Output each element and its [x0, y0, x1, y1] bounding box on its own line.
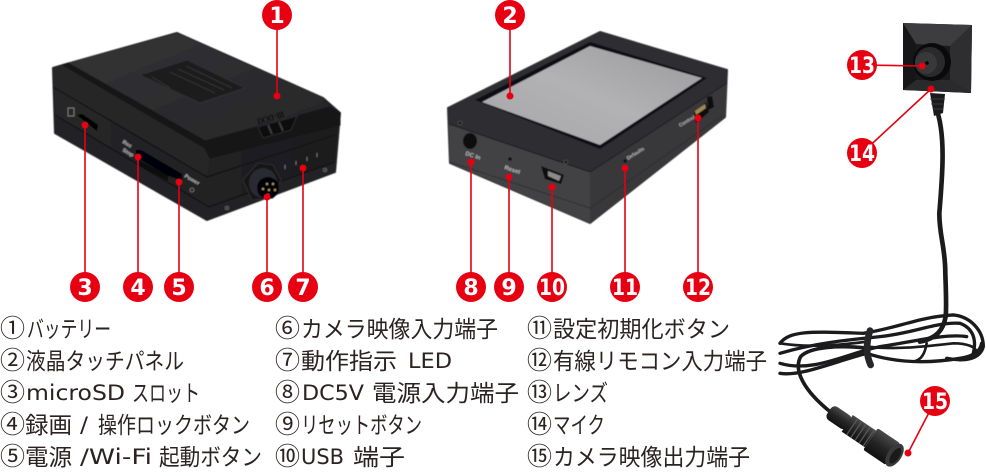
parts list: column 1: 液晶タッチパネル: [26, 348, 184, 374]
embossed marking: III-IXXI: [256, 109, 285, 126]
parts list: column 2: 動作指示: [301, 348, 397, 374]
device: front view of recorder: Defaults: [626, 146, 646, 162]
reset hole: [508, 157, 512, 161]
parts list: column 1: /Wi-Fi: [80, 445, 152, 469]
parts list: column 3: ⑬: [527, 373, 552, 409]
parts list: column 1: 起動ボタン: [159, 444, 262, 470]
camera with cable: [780, 23, 983, 470]
callout 3: microSD slot: [70, 122, 100, 302]
parts list: column 2: リセットボタン: [301, 412, 422, 438]
callout 13: lens: 13: [849, 54, 875, 79]
callout 11: default button: 11: [612, 276, 638, 301]
callout 1: battery: 1: [269, 4, 285, 29]
parts list: column 1: ②: [0, 341, 25, 377]
callout 10: USB: [537, 184, 567, 302]
microSD slot: [77, 114, 98, 131]
parts list: column 1: [0, 309, 262, 473]
callout 5: power button: 5: [171, 276, 187, 301]
parts list: column 3: 設定初期化ボタン: [553, 316, 730, 342]
callout 12: remote input: 12: [685, 276, 711, 301]
callout 15: camera output: 15: [922, 390, 948, 415]
parts list: column 2: 端子: [353, 444, 405, 470]
wired remote port: [694, 102, 709, 123]
callout 9: reset: 9: [501, 276, 517, 301]
parts list: column 3: ⑮: [527, 437, 552, 473]
callout 7: LED: [288, 164, 318, 302]
parts list: column 3: 有線リモコン入力端子: [553, 348, 767, 374]
camera cable: [780, 115, 983, 412]
callout 7: LED: 7: [295, 276, 311, 301]
device: rear view of recorder: [53, 33, 340, 220]
microSD icon: [68, 108, 74, 116]
parts list: column 3: ⑪: [527, 309, 552, 345]
parts list: column 2: ⑥: [275, 309, 300, 345]
parts list: column 2: 電源入力端子: [372, 380, 519, 406]
callout 10: USB: 10: [539, 276, 565, 301]
latch: [258, 116, 297, 138]
camera output connector: [822, 400, 908, 470]
parts list: column 3: [527, 309, 767, 473]
device: front view of recorder: [448, 32, 727, 223]
sticker label: [140, 60, 245, 103]
callout 6: camera input: [252, 194, 282, 302]
parts list: column 3: マイク: [553, 412, 605, 438]
callout 12: remote input: [683, 114, 713, 302]
parts list: column 1: 操作ロックボタン: [98, 412, 250, 438]
parts list: column 1: スロット: [132, 380, 200, 406]
callout 14: microphone: [847, 86, 934, 168]
callout 4: record button: [123, 154, 153, 302]
callout 13: lens: [847, 50, 926, 80]
parts list: column 3: ⑫: [527, 341, 552, 377]
cable tie: [867, 331, 871, 365]
bezel recess: [475, 42, 707, 149]
LCD panel: [482, 46, 702, 145]
device: front view of recorder: DC In: [464, 151, 481, 162]
device: rear view of recorder: Rec: [121, 140, 133, 150]
parts list: column 2: ⑨: [275, 405, 300, 441]
parts list: column 2: ⑦: [275, 341, 300, 377]
callout 15: camera output: [904, 386, 950, 456]
parts list: column 3: カメラ映像出力端子: [553, 444, 750, 470]
device: rear view of recorder: Power: [183, 174, 201, 187]
parts list: column 2: ⑧: [275, 373, 300, 409]
parts list: column 1: ④: [0, 405, 25, 441]
DC jack: [463, 133, 477, 149]
callout 1: battery: [262, 0, 292, 100]
rec and power buttons: [136, 150, 182, 180]
strain relief: [930, 93, 945, 116]
device: front view of recorder: Control: [678, 114, 697, 129]
callout 11: default button: [610, 164, 640, 302]
parts list: column 2: DC5V: [302, 381, 365, 405]
USB port: [541, 166, 564, 184]
parts list: column 3: ⑭: [527, 405, 552, 441]
parts list: column 2: ⑩: [275, 437, 300, 473]
parts list: column 1: ⑤: [0, 437, 25, 473]
device: front view of recorder: Reset: [503, 165, 521, 176]
callout 9: reset: [494, 174, 524, 302]
parts list: column 2: [275, 309, 519, 473]
parts list: column 2: カメラ映像入力端子: [301, 316, 498, 342]
parts list: column 1: 録画: [25, 412, 72, 438]
callout 6: camera input: 6: [259, 276, 275, 301]
battery lid: [68, 33, 330, 141]
parts list: column 3: レンズ: [553, 380, 608, 406]
status LEDs: [285, 153, 317, 169]
parts list: column 2: USB: [301, 445, 344, 469]
parts list: column 2: LED: [408, 349, 452, 373]
callout 2: touch panel: [495, 0, 525, 100]
parts list: column 1: ③: [0, 373, 25, 409]
callout 4: record button: 4: [130, 276, 146, 301]
callout 3: microSD slot: 3: [77, 276, 93, 301]
parts list: column 1: 電源: [25, 444, 72, 470]
callout 2: touch panel: 2: [502, 4, 518, 29]
parts list: column 1: /: [80, 413, 89, 437]
parts list: column 1: microSD: [26, 381, 125, 405]
parts list: column 1: ①: [0, 309, 25, 345]
device: rear view of recorder: Stop: [121, 148, 135, 159]
default button: [623, 159, 627, 163]
camera head: [903, 23, 972, 116]
callout 8: DC input: [456, 158, 486, 302]
callout 5: power button: [164, 178, 194, 302]
camera connector: [243, 163, 281, 200]
parts list: column 1: バッテリー: [27, 316, 111, 342]
callout 8: DC input: 8: [463, 276, 479, 301]
callout 14: microphone: 14: [849, 142, 875, 167]
